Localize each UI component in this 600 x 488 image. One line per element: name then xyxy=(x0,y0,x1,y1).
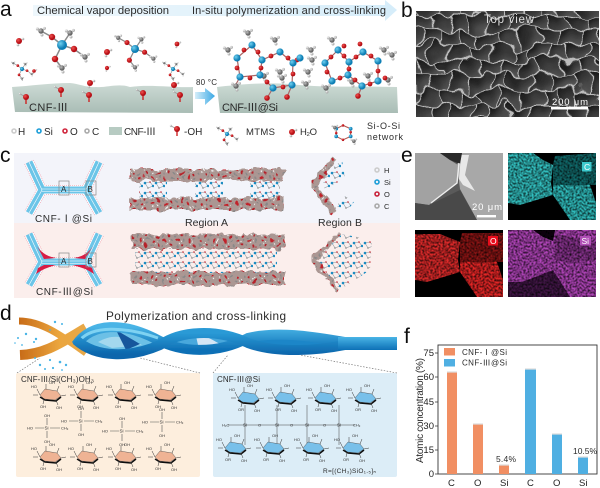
orange box: CNF-III/Si(CH3)OH3 xyxy=(16,373,200,477)
schematic CNF-III@Si: B xyxy=(88,257,93,266)
blue box: CNF-III@Si: Si xyxy=(337,422,341,428)
oxygen map xyxy=(415,230,503,297)
legend row: network xyxy=(367,132,404,142)
silicon map: Si xyxy=(582,236,589,246)
y axis ticks and labels: 75 xyxy=(423,348,434,359)
y axis title: Atomic concentration (%) xyxy=(415,358,426,463)
panel a: vapor deposition scheme xyxy=(0,0,404,146)
blue box: CNF-III@Si: CNF-Ⅲ@Si xyxy=(217,375,260,384)
atom legend xyxy=(375,166,391,211)
y axis ticks and labels: 45 xyxy=(423,397,434,408)
banner heading: in-situ polymerization: In-situ polymerization and cross-linking xyxy=(192,5,386,17)
region A top structure xyxy=(129,169,284,210)
CNF-I@Si bars xyxy=(447,372,509,474)
SEM image of fibre junction xyxy=(415,153,503,220)
atom legend: Si xyxy=(384,178,391,187)
surface hydroxyl groups xyxy=(19,86,183,104)
scale bar 20 um: 20 μm xyxy=(472,202,502,213)
y axis ticks and labels xyxy=(423,348,438,480)
region B label: Region B xyxy=(318,217,362,229)
CNF-III@Si bars xyxy=(525,369,588,474)
SEM micrograph xyxy=(416,11,599,117)
caption top view: Top view xyxy=(484,14,535,26)
legend row: -OH xyxy=(184,127,202,138)
atom legend: C xyxy=(384,202,390,211)
atom legend: H xyxy=(384,166,389,175)
heading polymerization: Polymerization and cross-linking xyxy=(106,309,286,323)
panel d: twisted fibre and chemistry xyxy=(0,302,397,477)
value labels: 5.4% xyxy=(496,454,516,464)
legend row: Si xyxy=(44,127,53,138)
oxygen map: O xyxy=(490,236,497,246)
MTMS molecules in vapor xyxy=(11,27,185,81)
legend row: CNF-Ⅲ xyxy=(124,127,156,138)
blue box: CNF-III@Si xyxy=(213,373,397,477)
panel label f: f xyxy=(404,325,410,348)
heating arrow 80 C xyxy=(195,78,217,105)
lower background xyxy=(14,223,400,298)
panel label d: d xyxy=(0,302,12,325)
schematic CNF-I@Si xyxy=(29,162,99,213)
legend row: MTMS xyxy=(246,127,275,138)
region A bottom structure xyxy=(131,234,286,285)
blue box: CNF-III@Si: O xyxy=(290,422,293,428)
scale bar 200 um: 200 μm xyxy=(552,97,588,108)
label CNF-III: CNF-Ⅲ xyxy=(29,102,68,114)
blue box: CNF-III@Si: Si xyxy=(243,422,247,428)
panel b: SEM top view xyxy=(402,2,599,117)
blue box: CNF-III@Si: O xyxy=(323,422,326,428)
carbon map xyxy=(508,153,596,220)
y axis ticks and labels: 0 xyxy=(429,469,434,480)
y axis ticks and labels: 15 xyxy=(423,445,434,456)
schematic CNF-III@Si: A xyxy=(61,257,67,266)
legend row xyxy=(12,121,404,146)
schematic CNF-III@Si xyxy=(29,234,99,285)
panel label c: c xyxy=(0,144,10,167)
orange box: CNF-III/Si(CH3)OH3: CNF-Ⅲ/Si(CH₃)OH₃ xyxy=(21,375,94,384)
chart legend xyxy=(444,348,507,368)
process banner arrow xyxy=(33,0,397,21)
legend row: Si-O-Si xyxy=(367,121,400,131)
blue box: CNF-III@Si: CH₃ xyxy=(353,422,361,428)
legend row: H xyxy=(18,127,25,138)
CNF-III slab left xyxy=(12,83,193,113)
blue box: CNF-III@Si: Si xyxy=(305,422,309,428)
chart legend: CNF-Ⅰ@Si xyxy=(462,348,507,357)
legend row: C xyxy=(92,127,99,138)
legend row: H₂O xyxy=(300,127,317,138)
value label 10.5: 10.5% xyxy=(573,446,597,456)
region B top structure xyxy=(313,158,354,213)
schematic CNF-I@Si: A xyxy=(61,185,67,194)
silicon map xyxy=(508,230,596,297)
y axis ticks and labels: 60 xyxy=(423,372,434,383)
error bars xyxy=(447,369,588,465)
blue box: CNF-III@Si: H₃C xyxy=(222,422,230,428)
heating arrow 80 C: 80 °C xyxy=(196,78,217,87)
label CNF-I@Si: CNF-Ⅰ@Si xyxy=(35,214,92,225)
twisted fibre illustration xyxy=(14,321,397,373)
panel e: EDS mapping xyxy=(401,144,596,297)
schematic CNF-I@Si: B xyxy=(88,185,93,194)
banner heading: chemical vapor deposition: Chemical vapor deposition xyxy=(37,5,169,17)
water molecules xyxy=(16,38,181,90)
blue box: CNF-III@Si: Si xyxy=(275,422,279,428)
chart legend: CNF-Ⅲ@Si xyxy=(462,358,507,368)
x axis labels xyxy=(448,478,587,488)
CNF-III slab right xyxy=(217,83,398,113)
region B bottom structure xyxy=(313,233,372,290)
legend row: O xyxy=(70,127,78,138)
carbon map: C xyxy=(584,162,590,172)
panel f: atomic concentration bar chart xyxy=(404,325,597,488)
plot frame xyxy=(438,345,597,474)
panel label e: e xyxy=(401,144,413,167)
Si-O-Si network on surface xyxy=(223,29,397,101)
label CNF-III@Si: CNF-Ⅲ@Si xyxy=(36,287,93,298)
y axis ticks and labels: 30 xyxy=(423,421,434,432)
upper background xyxy=(14,153,400,223)
panel c: simulation structures xyxy=(0,144,400,298)
blue box: CNF-III@Si: R=[(CH₃)SiO₁.₅]ₙ xyxy=(323,468,376,475)
blue box: CNF-III@Si: O xyxy=(258,422,261,428)
label CNF-III@Si: CNF-Ⅲ@Si xyxy=(222,102,278,114)
region labels: Region A xyxy=(185,217,228,229)
atom legend: O xyxy=(384,190,390,199)
